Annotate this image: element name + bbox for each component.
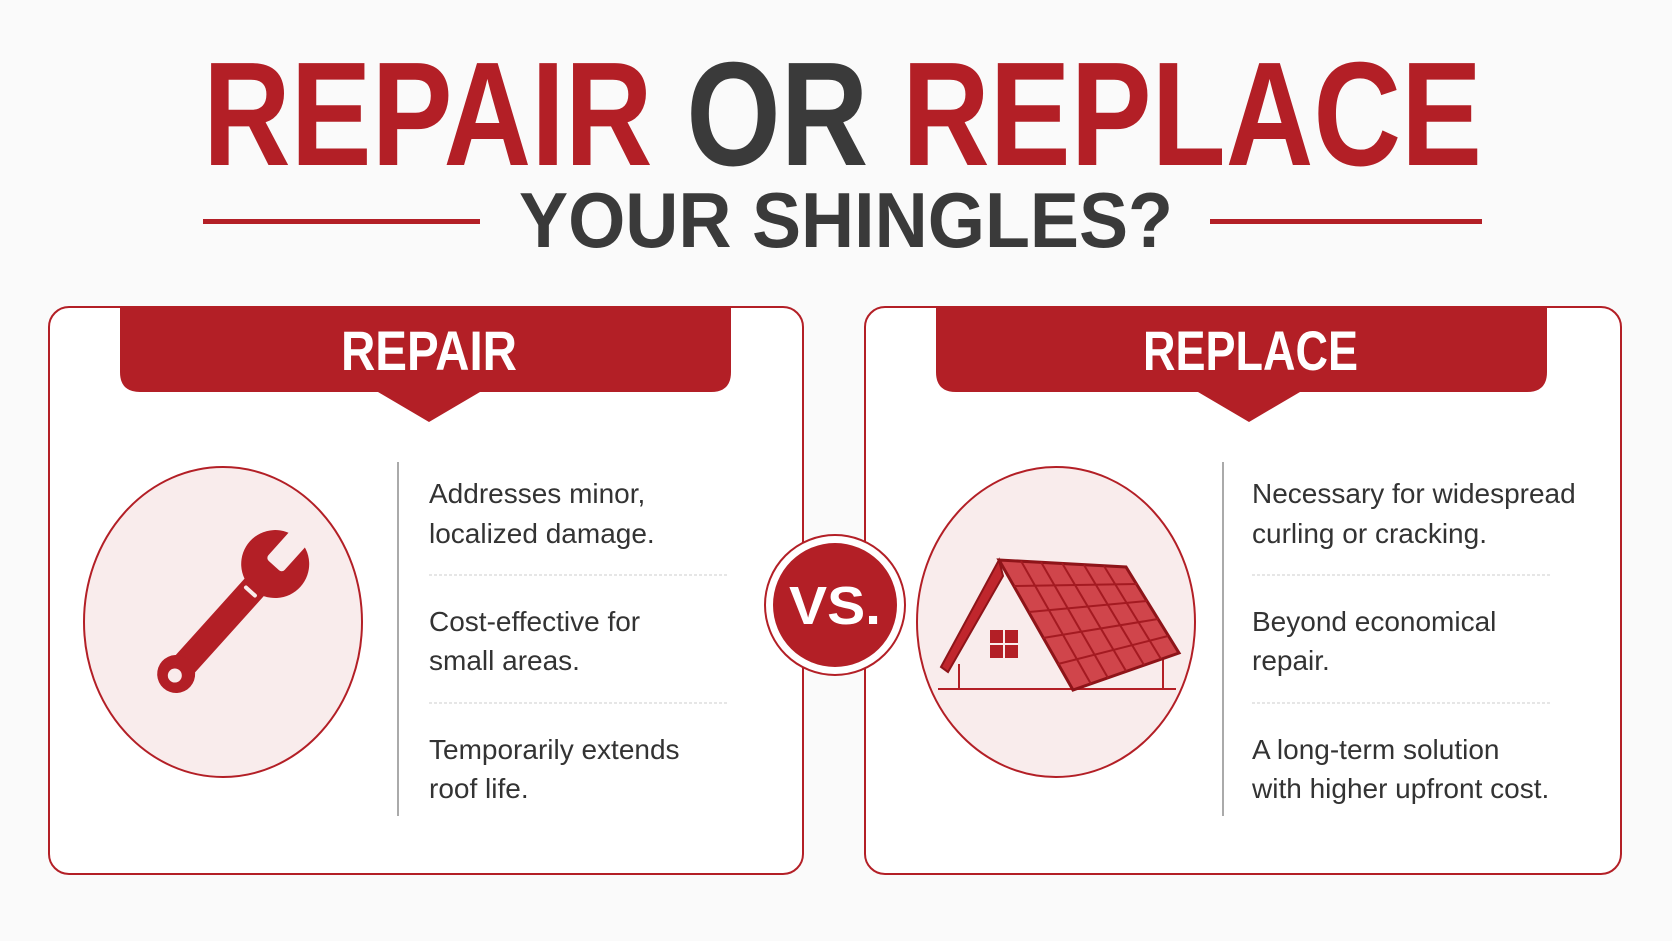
- vs badge: VS.: [789, 576, 881, 636]
- title: REPAIR OR REPLACE: [203, 32, 1482, 197]
- text: replace points: [1251, 478, 1576, 804]
- text: replace points: with higher upfront cost.: [1251, 773, 1549, 804]
- text: replace points: A long-term solution: [1252, 734, 1499, 765]
- text: repair points: Addresses minor,: [429, 478, 645, 509]
- header: repair: [120, 306, 731, 422]
- subtitle: YOUR SHINGLES?: [519, 176, 1173, 264]
- text: replace points: Beyond economical: [1252, 606, 1496, 637]
- header: repair: REPAIR: [341, 319, 517, 382]
- text: replace points: Necessary for widespread: [1252, 478, 1576, 509]
- text: repair points: roof life.: [429, 773, 529, 804]
- header: replace: [936, 306, 1547, 422]
- icon: house roof: [917, 467, 1195, 777]
- header: replace: REPLACE: [1143, 319, 1358, 382]
- panel: repair: [49, 306, 803, 874]
- subtitle: [203, 176, 1482, 264]
- text: repair points: small areas.: [429, 645, 580, 676]
- text: repair points: [429, 478, 728, 804]
- text: replace points: repair.: [1252, 645, 1330, 676]
- text: repair points: Temporarily extends: [429, 734, 680, 765]
- text: repair points: localized damage.: [429, 518, 655, 549]
- icon: wrench: [84, 467, 362, 777]
- vs badge: [765, 535, 905, 675]
- text: repair points: Cost-effective for: [429, 606, 640, 637]
- panel: replace: [865, 306, 1621, 874]
- text: replace points: curling or cracking.: [1252, 518, 1487, 549]
